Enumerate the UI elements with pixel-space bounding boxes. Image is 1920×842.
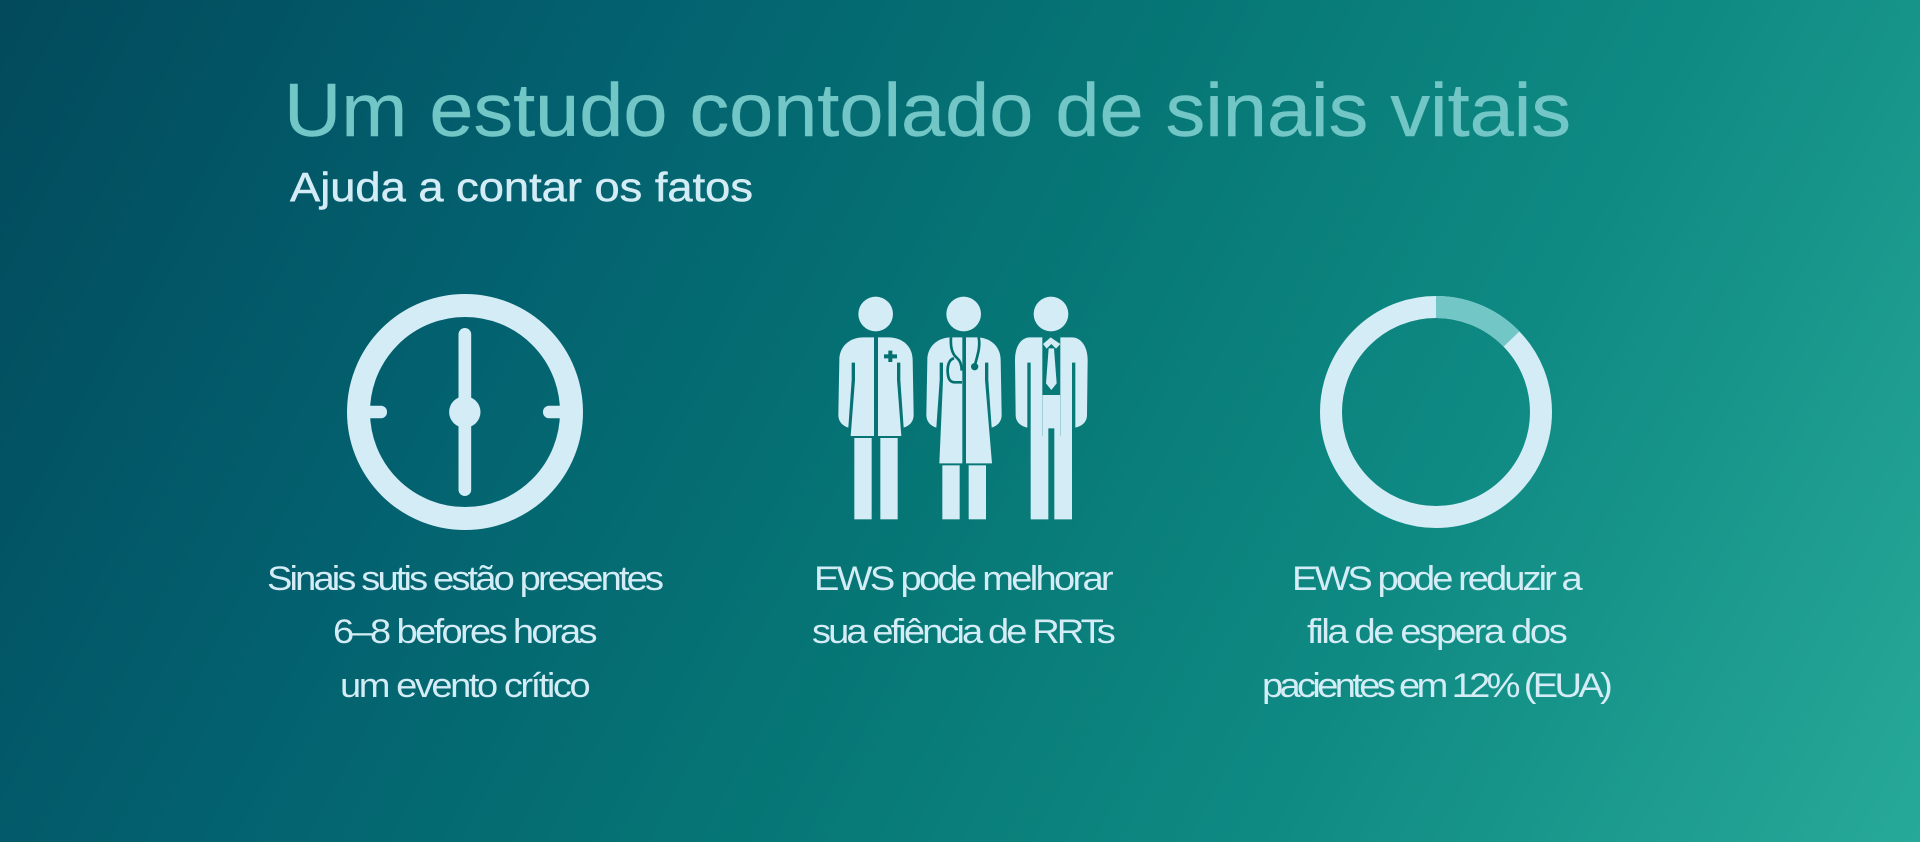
text: patient queue: fila de espera dos bbox=[1307, 612, 1568, 651]
icon: administrator figure in suit bbox=[1015, 297, 1088, 519]
icon: clinical team bbox=[838, 297, 1088, 519]
text: patient queue: pacientes em 12% (EUA) bbox=[1262, 666, 1613, 705]
text: subtle signs bbox=[267, 559, 664, 705]
subtitle: Ajuda a contar os fatos bbox=[290, 164, 753, 210]
icon: donut chart 12 percent bbox=[1331, 307, 1541, 517]
icon: doctor figure with stethoscope bbox=[926, 297, 1002, 519]
title: Um estudo contolado de sinais vitais bbox=[284, 68, 1571, 152]
text: patient queue: EWS pode reduzir a bbox=[1292, 559, 1584, 598]
text: subtle signs: um evento crítico bbox=[340, 666, 591, 705]
text: patient queue bbox=[1262, 559, 1613, 705]
text: RRT efficiency: sua efiência de RRTs bbox=[812, 612, 1116, 651]
text: subtle signs: 6–8 befores horas bbox=[333, 612, 598, 651]
text: subtle signs: Sinais sutis estão presentes bbox=[267, 559, 664, 598]
text: RRT efficiency: EWS pode melhorar bbox=[814, 559, 1114, 598]
icon: nurse figure bbox=[838, 297, 914, 519]
text: RRT efficiency bbox=[812, 559, 1116, 651]
icon: clock bbox=[358, 306, 572, 518]
